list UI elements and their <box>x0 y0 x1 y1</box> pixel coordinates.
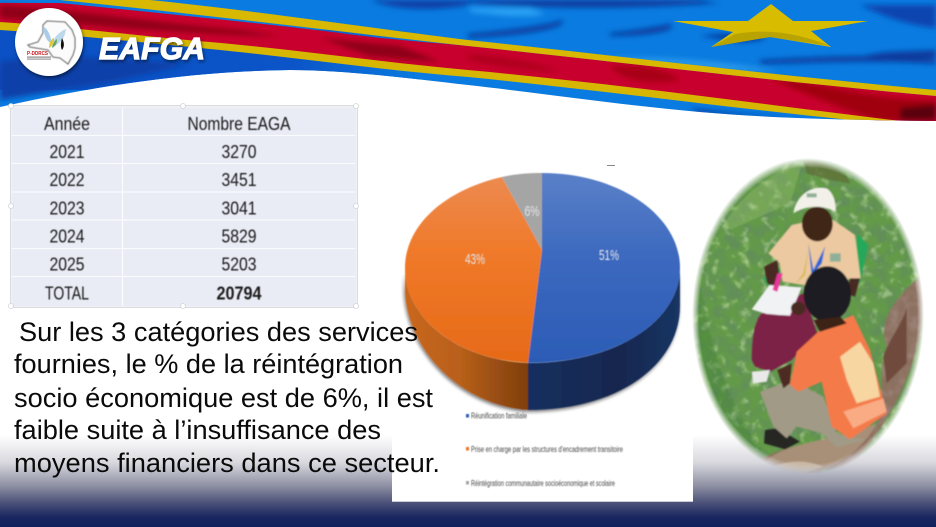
red band <box>0 3 936 121</box>
table rows: 2024 <box>50 226 84 246</box>
table rows: Nombre EAGA <box>188 114 290 134</box>
table rows: 2022 <box>50 170 84 190</box>
icon: map of DRC <box>28 21 75 64</box>
flag banner <box>0 0 936 125</box>
man shirt <box>768 220 861 287</box>
table rows: 2025 <box>50 254 84 274</box>
slice: 43% <box>405 177 542 363</box>
legend: Réintégration communautaire socioéconomique et scolaire <box>471 479 615 488</box>
description text <box>14 317 440 478</box>
slice: 6% <box>502 173 542 250</box>
man head <box>802 207 833 241</box>
description text: socio économique est de 6%, il est <box>14 383 433 413</box>
panel: pie chart card <box>392 150 693 502</box>
boy trousers <box>760 380 865 447</box>
hand on paper <box>791 302 806 315</box>
pie labels: 51% <box>599 247 619 264</box>
logo <box>15 8 83 76</box>
table rows: 5829 <box>222 226 256 246</box>
boy arm <box>777 363 792 388</box>
pie side: blue <box>528 268 680 410</box>
yellow stripes <box>60 0 936 96</box>
table rows: TOTAL <box>45 284 89 304</box>
table <box>8 104 358 308</box>
pie labels: 43% <box>465 251 485 268</box>
pie side: orange <box>405 268 528 410</box>
pie chart <box>405 173 680 410</box>
table rows: 20794 <box>216 284 262 304</box>
table rows: 3451 <box>222 170 256 190</box>
paper <box>752 285 802 316</box>
man trousers <box>752 293 817 372</box>
legend: Réunification familiale <box>471 412 527 420</box>
slice: 51% <box>528 173 680 363</box>
title: EAFGA <box>99 31 205 66</box>
logo name: P-DDRCS <box>27 51 49 57</box>
description text: moyens financiers dans ce secteur. <box>14 448 440 478</box>
man arm <box>764 260 860 297</box>
table rows: 2021 <box>50 142 84 162</box>
table rows <box>44 114 290 304</box>
legend <box>466 412 623 488</box>
boy shirt <box>790 315 887 439</box>
shoes <box>752 370 770 383</box>
boy head <box>804 266 851 322</box>
photo: oval portrait of interview <box>690 155 930 480</box>
flag star <box>673 4 868 47</box>
table rows: 2023 <box>50 198 84 218</box>
rock and soil <box>760 273 924 477</box>
table rows: 3041 <box>222 198 256 218</box>
pie labels <box>465 203 619 268</box>
description text: faible suite à l’insuffisance des <box>14 415 381 445</box>
table rows: Année <box>44 114 90 134</box>
table rows: 3270 <box>222 142 256 162</box>
description text: fournies, le % de la réintégration <box>14 349 403 379</box>
table rows: 5203 <box>222 254 256 274</box>
legend: Prise en charge par les structures d'encadrement transitoire <box>471 445 623 454</box>
chair <box>762 234 869 286</box>
description text: Sur les 3 catégories des services <box>19 317 418 347</box>
pie labels: 6% <box>524 203 540 220</box>
